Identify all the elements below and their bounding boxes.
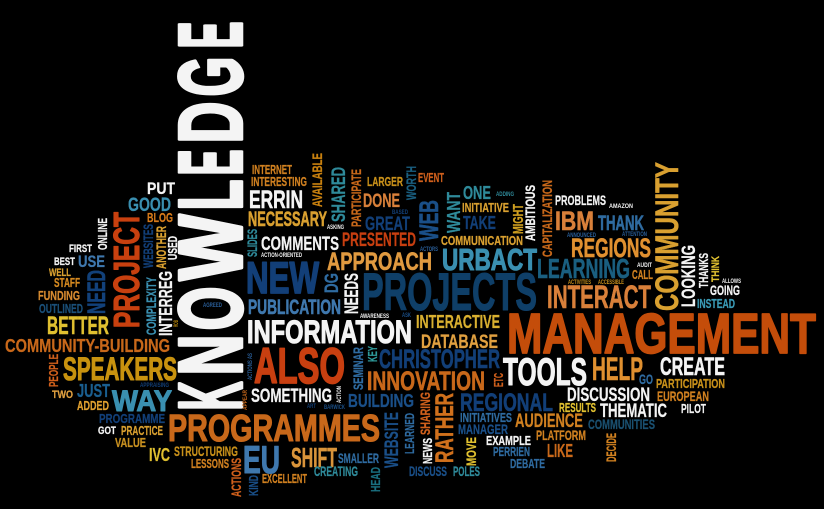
word: capitalization: CAPITALIZATION (539, 180, 555, 257)
word: seminar: SEMINAR (350, 347, 366, 390)
word: done: DONE (363, 190, 400, 212)
word: rather: RATHER (431, 393, 459, 463)
small word: based: BASED (392, 209, 408, 216)
word: call: CALL (632, 268, 653, 282)
word: ivc: IVC (149, 445, 170, 465)
word: outlined: OUTLINED (39, 302, 83, 316)
word: initiative: INITIATIVE (462, 201, 509, 215)
small word: amazon: AMAZON (609, 203, 633, 210)
word: going: GOING (710, 282, 740, 298)
word: news: NEWS (421, 438, 435, 464)
small word: awareness: AWARENESS (360, 313, 389, 320)
word: website: WEBSITE (381, 412, 403, 468)
word: dg: DG (321, 273, 343, 293)
word: thematic: THEMATIC (600, 400, 667, 422)
word: internet: INTERNET (252, 163, 292, 177)
small word: action-oriented: ACTION-ORIENTED (261, 252, 302, 259)
word: discussion: DISCUSSION (567, 384, 650, 406)
word: lessons: LESSONS (191, 457, 229, 471)
word: looking: LOOKING (678, 245, 700, 307)
word: approach: APPROACH (327, 248, 432, 276)
word: kind: KIND (247, 475, 261, 496)
word: also: ALSO (254, 337, 345, 394)
word: speakers: SPEAKERS (63, 351, 177, 387)
word: knowledge: L (162, 180, 262, 210)
word: larger: LARGER (367, 175, 403, 189)
word: web: WEB (414, 200, 444, 241)
word: projects: PROJECTS (362, 263, 537, 322)
word: websites: WEBSITES (140, 224, 156, 268)
small word: allows: ALLOWS (722, 278, 741, 285)
word: one: ONE (463, 183, 491, 203)
word: project: PROJECT (106, 212, 147, 328)
word: way: WAY (112, 385, 172, 418)
word: put: PUT (147, 179, 176, 198)
word: audience: AUDIENCE (515, 410, 583, 432)
word: shift: SHIFT (291, 442, 337, 473)
word: creating: CREATING (314, 463, 358, 479)
small word: audit: AUDIT (637, 262, 652, 269)
word: available: AVAILABLE (309, 153, 325, 207)
word: smaller: SMALLER (338, 450, 379, 466)
word: results: RESULTS (559, 401, 596, 415)
word: actions: ACTIONS (228, 458, 244, 497)
word: programme: PROGRAMME (99, 412, 165, 426)
word: excellent: EXCELLENT (262, 472, 307, 486)
word: key: KEY (366, 346, 380, 362)
word: funding: FUNDING (38, 289, 80, 303)
word: knowledge: K (162, 382, 262, 410)
word: errin: ERRIN (249, 186, 303, 214)
word: got: GOT (98, 425, 116, 437)
word: head: HEAD (369, 467, 383, 492)
word: interesting: INTERESTING (251, 175, 307, 189)
small word: asking: ASKING (327, 224, 344, 231)
word: eu: EU (243, 439, 280, 482)
word: pilot: PILOT (681, 402, 706, 416)
word: innovation: INNOVATION (367, 366, 485, 396)
word: poles: POLES (453, 463, 480, 479)
word: publication: PUBLICATION (248, 296, 341, 319)
word: new: NEW (246, 253, 319, 303)
word: presented: PRESENTED (342, 229, 416, 251)
word: knowledge: N (162, 334, 262, 376)
word: just: JUST (77, 381, 110, 401)
word: knowledge: W (162, 214, 262, 280)
word: two: TWO (52, 389, 73, 401)
word: community: COMMUNITY (649, 162, 685, 311)
word: european: EUROPEAN (657, 388, 709, 404)
word: community-building: COMMUNITY-BUILDING (5, 336, 170, 356)
word: knowledge: D (162, 102, 262, 144)
word: problems: PROBLEMS (555, 192, 606, 208)
word: manager: MANAGER (458, 421, 508, 437)
word: knowledge: G (162, 56, 262, 96)
word: thanks: THANKS (697, 253, 711, 288)
word: better: BETTER (47, 312, 109, 340)
word: use: USE (78, 252, 105, 271)
word: added: ADDED (77, 399, 109, 413)
word: create: CREATE (660, 353, 725, 381)
word: thank: THANK (598, 212, 644, 235)
word: blog: BLOG (147, 211, 173, 225)
word: instead: INSTEAD (697, 297, 735, 311)
word: interactive: INTERACTIVE (416, 312, 500, 332)
word: debate: DEBATE (510, 457, 545, 471)
word: need: NEED (83, 270, 111, 314)
word: online: ONLINE (96, 218, 110, 250)
word: help: HELP (592, 351, 643, 387)
word: christopher: CHRISTOPHER (379, 344, 500, 374)
word: shared: SHARED (328, 167, 350, 222)
word: communication: COMMUNICATION (441, 234, 523, 248)
word: urbact: URBACT (442, 242, 537, 277)
word: building: BUILDING (348, 391, 414, 411)
word: learned: LEARNED (403, 413, 417, 454)
word: learning: LEARNING (537, 253, 630, 284)
small word: actions as: ACTIONS AS (247, 353, 254, 380)
word: programmes: PROGRAMMES (168, 408, 380, 450)
word: decide: DECIDE (603, 433, 619, 462)
word: ambitious: AMBITIOUS (522, 185, 538, 241)
word: take: TAKE (463, 213, 496, 233)
word: structuring: STRUCTURING (174, 443, 238, 459)
word: great: GREAT (365, 213, 410, 235)
word: ibm: IBM (555, 206, 594, 236)
small word: appear: APPEAR (242, 390, 249, 410)
word: participation: PARTICIPATION (656, 377, 725, 391)
word: practice: PRACTICE (121, 424, 163, 438)
word: discuss: DISCUSS (409, 463, 447, 479)
small word: action: ACTION (336, 386, 343, 403)
small word: art: ART (307, 403, 316, 410)
word: database: DATABASE (421, 331, 498, 353)
word: want: WANT (444, 192, 464, 233)
small word: appraising: APPRAISING (140, 382, 169, 389)
small word: rob: ROB (173, 320, 180, 327)
word: etc: ETC (492, 373, 506, 387)
word: first: FIRST (69, 243, 92, 255)
word: event: EVENT (418, 171, 444, 185)
small word: ask: ASK (402, 312, 411, 319)
small word: agreed: AGREED (203, 302, 222, 309)
word: participate: PARTICIPATE (348, 169, 364, 227)
small word: announced: ANNOUNCED (567, 232, 596, 239)
small word: accessible: ACCESSIBLE (598, 279, 624, 286)
word: good: GOOD (128, 194, 171, 216)
word: example: EXAMPLE (486, 434, 531, 448)
word: needs: NEEDS (341, 273, 363, 314)
word: regional: REGIONAL (460, 389, 553, 417)
word: another: ANOTHER (153, 226, 169, 269)
word: people: PEOPLE (47, 354, 61, 387)
word: might: MIGHT (510, 204, 527, 234)
small word: actors: ACTORS (420, 246, 438, 253)
word: go: GO (639, 371, 653, 387)
word: think: THINK (710, 256, 722, 282)
word: initiatives: INITIATIVES (460, 411, 512, 425)
word: interact: INTERACT (547, 279, 651, 315)
word: like: LIKE (547, 441, 573, 461)
small word: activities: ACTIVITIES (568, 279, 591, 286)
small word: attention: ATTENTION (622, 231, 647, 238)
word: complexity: COMPLEXITY (143, 277, 159, 335)
word: value: VALUE (115, 436, 146, 450)
small word: adding: ADDING (496, 191, 514, 198)
word: best: BEST (54, 256, 75, 268)
word: tools: TOOLS (503, 351, 587, 394)
word: regions: REGIONS (571, 233, 651, 263)
word: comments: COMMENTS (261, 233, 339, 255)
word: information: INFORMATION (247, 314, 412, 350)
word: move: MOVE (463, 437, 479, 466)
word: slides: SLIDES (244, 229, 260, 257)
word: well: WELL (49, 267, 71, 279)
word: something: SOMETHING (251, 385, 332, 407)
word: staff: STAFF (54, 276, 80, 290)
word: knowledge: E (162, 150, 262, 176)
small word: barwick: BARWICK (324, 404, 345, 411)
word: used: USED (166, 236, 180, 260)
word: interreg: INTERREG (156, 271, 176, 336)
word: sharing: SHARING (417, 392, 433, 435)
word: platform: PLATFORM (536, 427, 586, 443)
word: knowledge: O (162, 286, 262, 330)
word: communities: COMMUNITIES (588, 416, 655, 432)
word: necessary: NECESSARY (248, 208, 327, 231)
word: perrien: PERRIEN (493, 445, 530, 459)
word: worth: WORTH (403, 166, 419, 200)
